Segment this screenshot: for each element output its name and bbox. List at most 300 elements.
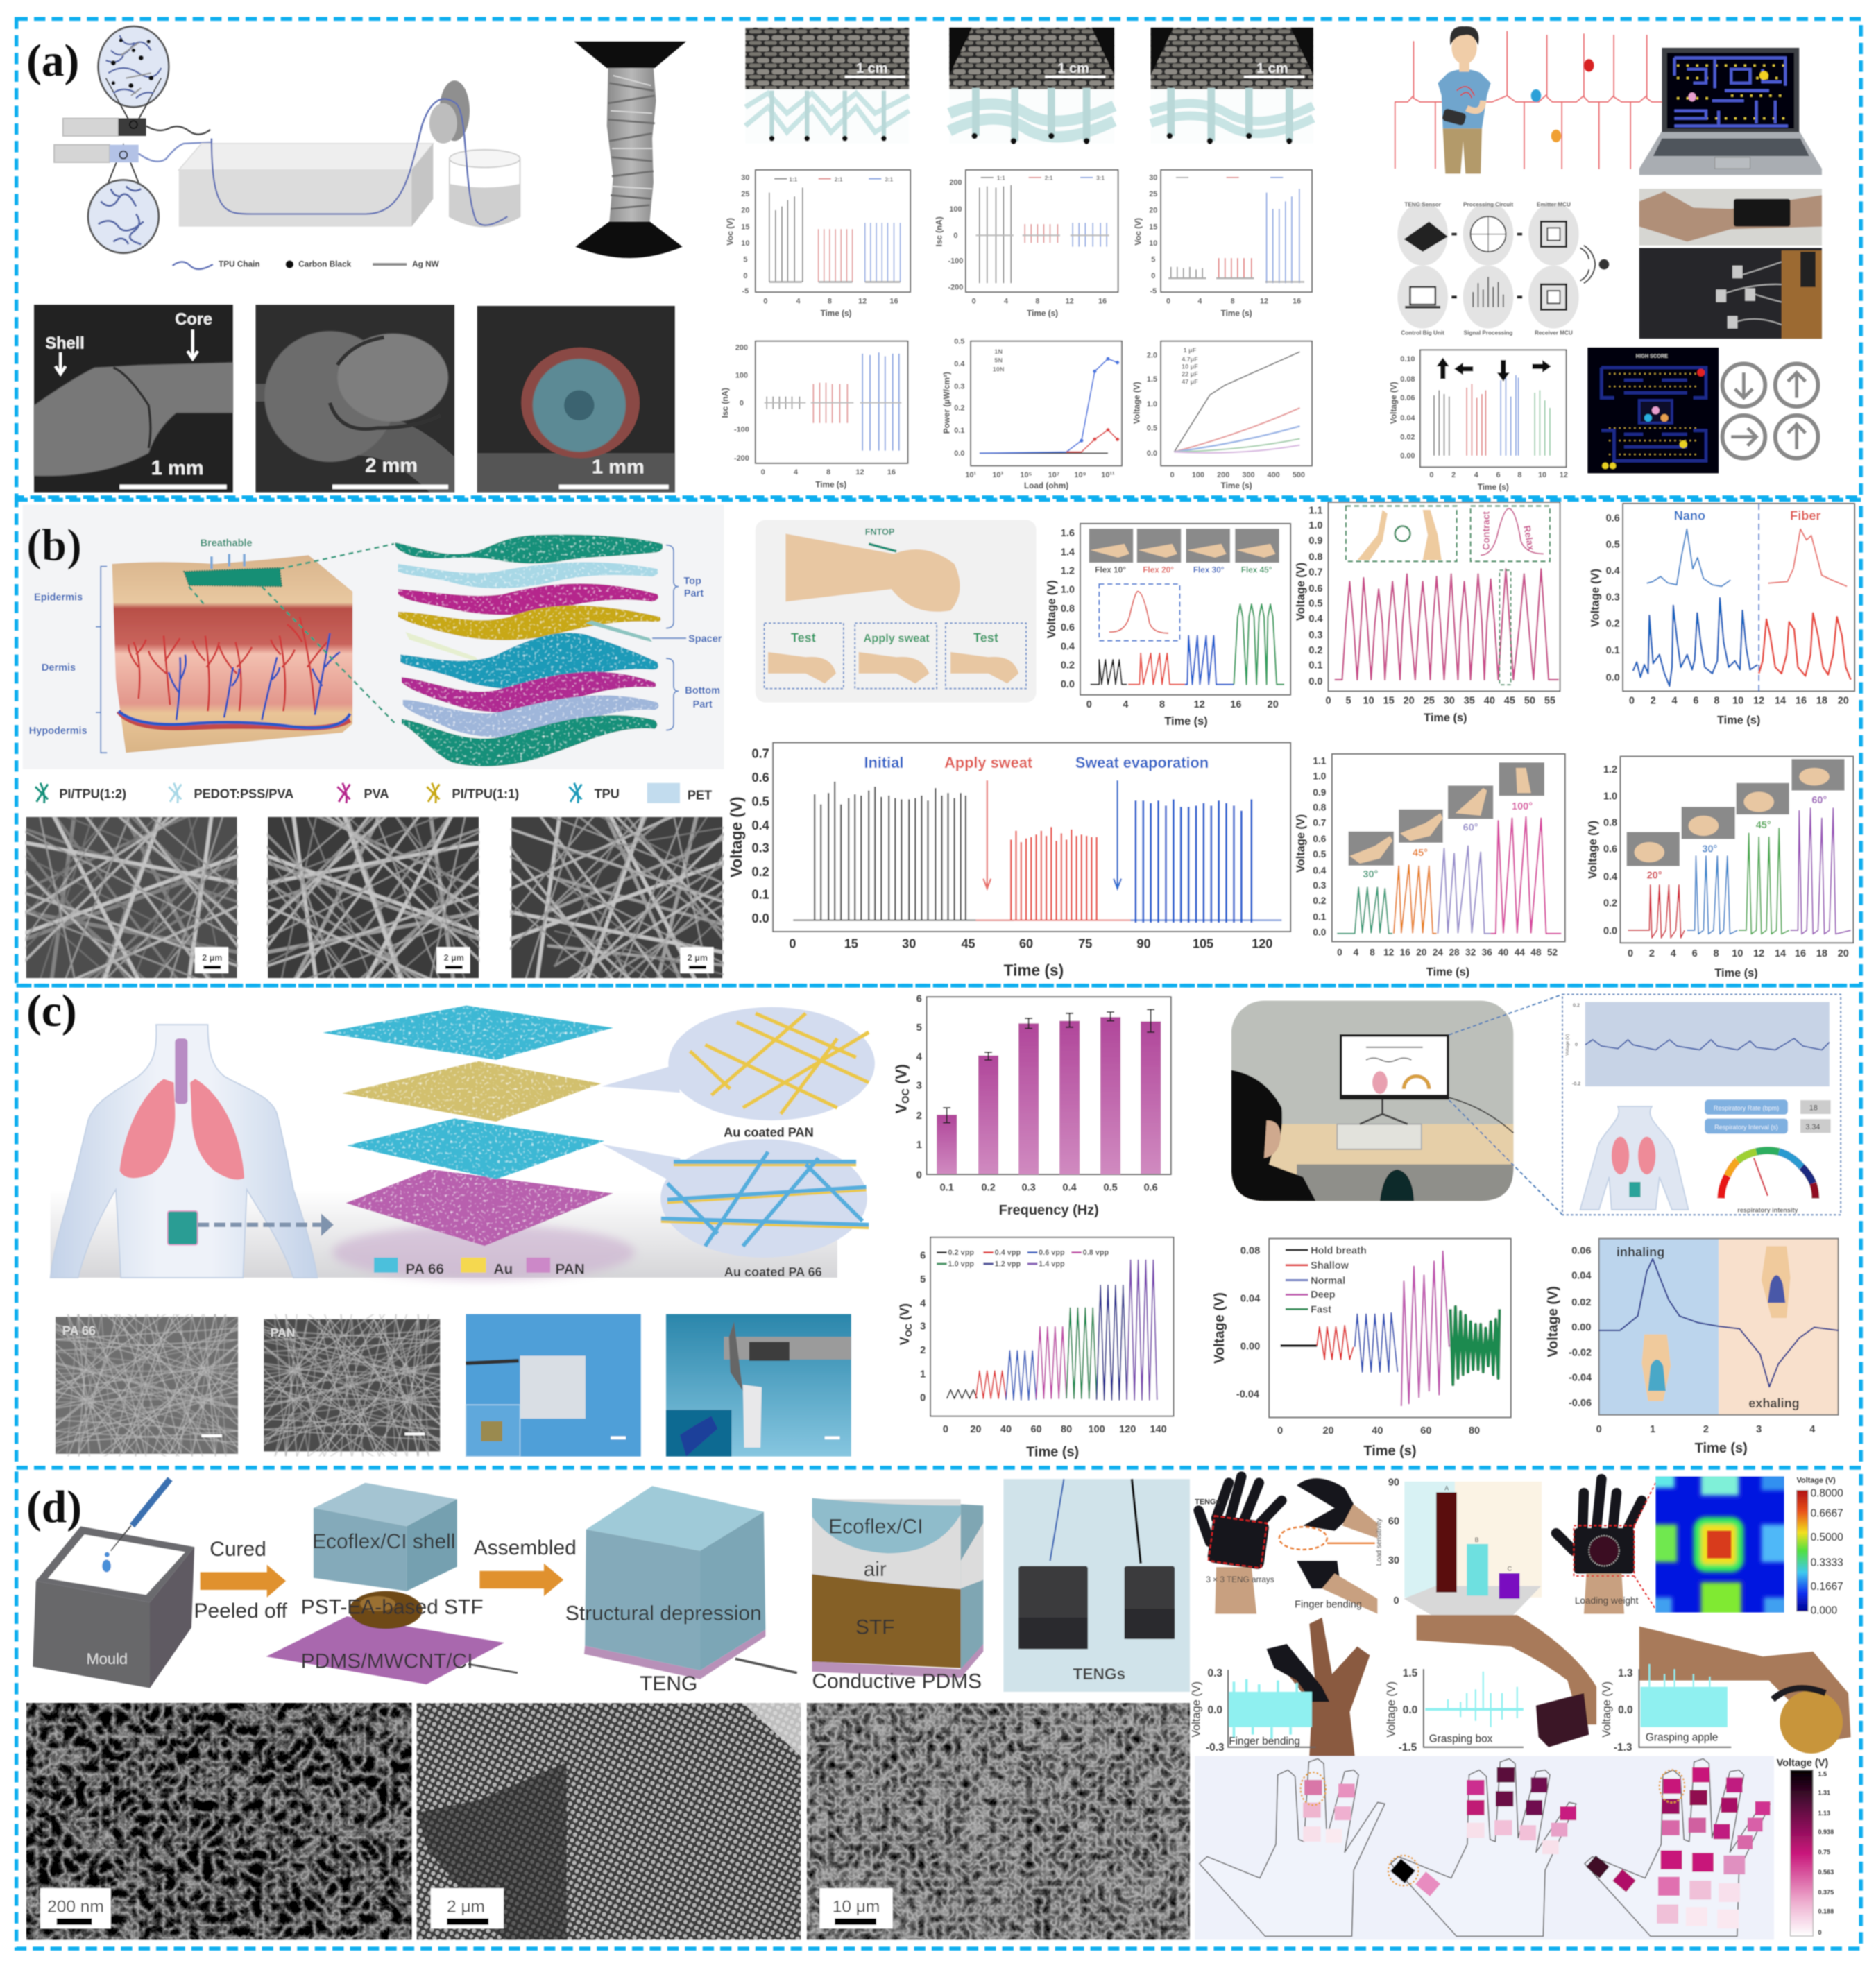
photo: wound fiber spool [574, 42, 686, 258]
signal with hand: grasping box: Voltage (V) [1385, 1681, 1398, 1738]
chart: Voc vs amplitude: 0.6 vpp [1039, 1249, 1065, 1257]
sweat test illustration [756, 520, 1037, 703]
chart: Voc vs frequency bars: 0.3 [1022, 1183, 1036, 1194]
chart: elbow contract and relax: 5 [1346, 695, 1351, 706]
arrow: cured and peeled off: Cured [210, 1538, 266, 1561]
SEM: 200 nm network: 200 nm [47, 1898, 104, 1917]
chart: Voc vs frequency bars: 0 [916, 1170, 922, 1181]
chart: bending angle, arm: 28 [1449, 947, 1460, 957]
exploded sensor layers [395, 535, 663, 766]
chart: bending angle, arm: 0.8 [1313, 803, 1327, 813]
chart: flex angle voltage: 8 [1159, 699, 1165, 710]
legend: PA 66, Au, PAN: PA 66 [405, 1261, 444, 1277]
sweat test illustration: Test [791, 631, 816, 644]
legend: PA 66, Au, PAN: Au [493, 1261, 513, 1277]
layer group labels: Top [683, 576, 701, 587]
SEM micrographs: nanofibers: 2 μm [688, 953, 708, 963]
chart: power versus load: Load (ohm) [1024, 481, 1068, 490]
chart: elbow contract and relax: Voltage (V) [1295, 563, 1307, 621]
chart: bending angle, arm: 0 [1337, 947, 1342, 957]
legend: materials: PI/TPU(1:2) [59, 787, 126, 801]
chart: sweat resistance time series: 120 [1252, 936, 1272, 950]
chart: bending angle, finger: 60° [1811, 795, 1827, 806]
chart: Voc vs frequency bars [893, 993, 1171, 1218]
dashed frame: panel b [17, 499, 1861, 986]
chart: Voc ratio: Voc (V) [726, 218, 735, 246]
chart: power versus load: 10¹¹ [1101, 471, 1115, 479]
signal with hand: grasping apple: 0.0 [1618, 1704, 1633, 1716]
magnified view: Au coated PAN: Au coated PAN [724, 1126, 814, 1140]
panel label (d): (d) [26, 1482, 82, 1532]
SEM: 2 um colloidal crystal: 2 μm [447, 1898, 485, 1917]
chart: capacitor charging: 300 [1242, 471, 1255, 479]
inset: monitoring software interface: respiratory intensity [1737, 1207, 1798, 1214]
chart: Voc vs amplitude: 80 [1061, 1424, 1072, 1435]
chart: Voc vs frequency bars: OC [901, 1088, 912, 1104]
photo: glove with TENG arrays: Finger bending [1295, 1599, 1362, 1610]
wireless sensing flow diagram: Receiver MCU [1535, 330, 1573, 336]
wireless sensing flow diagram: Emitter MCU [1537, 202, 1571, 208]
SEM: shell and core: 1 mm [151, 457, 204, 479]
chart: Voc size: 0 [1166, 297, 1170, 305]
chart: elbow contract and relax: Time (s) [1424, 712, 1467, 724]
chart: bending angle, arm: 20 [1416, 947, 1427, 957]
signal with hand: finger bending: 0.0 [1208, 1704, 1222, 1716]
chart: Voc vs amplitude: (V) [898, 1303, 912, 1324]
chart: Voc vs frequency bars: 6 [916, 993, 922, 1004]
skin layer labels: Hypodermis [29, 726, 87, 737]
chart: power versus load: 10⁷ [1048, 471, 1060, 479]
legend: PA 66, Au, PAN [374, 1258, 585, 1277]
chart: nano vs fiber: 16 [1796, 695, 1807, 706]
chart: nano vs fiber: Voltage (V) [1589, 569, 1602, 627]
sweat test illustration: Apply sweat [863, 632, 930, 644]
chart: bending angle, finger: 20° [1647, 871, 1662, 882]
backdrop gradient [51, 1190, 837, 1278]
SEM: 10 um particles: 10 μm [833, 1898, 880, 1917]
chart: Voc vs amplitude: 0 [920, 1393, 926, 1404]
sweat test illustration: FNTOP [865, 527, 895, 537]
chart: Voc ratio: 5 [743, 255, 747, 264]
chart: nano vs fiber: 14 [1775, 695, 1786, 706]
assembled TENG cube: TENG [640, 1672, 697, 1695]
illustration: laptop running game [1639, 48, 1822, 175]
chart: Voc ratio: 0 [763, 297, 767, 305]
chart: Voc ratio: 20 [741, 207, 749, 215]
chart: 3D bar chart: A [1444, 1485, 1449, 1492]
chart: 3D bar chart: 60 [1388, 1516, 1399, 1527]
chart: nano vs fiber: 10 [1732, 695, 1743, 706]
chart: bending angle, arm: 0.9 [1313, 787, 1327, 798]
SEM: shell and core [34, 305, 233, 492]
chart: bending angle, finger: 0.2 [1603, 898, 1617, 909]
chart: Isc size: -200 [734, 454, 749, 463]
chart: four-direction voltage: 2 [1451, 471, 1456, 479]
skin layer labels [29, 567, 107, 753]
chart: sweat resistance time series: 0 [789, 936, 796, 950]
chart: elbow contract and relax: 10 [1363, 695, 1374, 706]
signal with hand: grasping box: 1.5 [1403, 1668, 1418, 1679]
SEM: PA 66 nanofibers: PA 66 [62, 1324, 96, 1338]
chart: bending angle, arm: 0.2 [1313, 896, 1327, 906]
chart: Voc size [1134, 170, 1312, 318]
chart: inhaling and exhaling: 3 [1756, 1424, 1762, 1435]
chart: bending angle, arm: 0.0 [1313, 927, 1327, 937]
chart: flex angle voltage: 0 [1086, 699, 1092, 710]
skin layer labels: Epidermis [34, 592, 83, 603]
chart: flex angle voltage: 12 [1194, 699, 1205, 710]
chart: bending angle, finger: 8 [1713, 948, 1719, 959]
chart: flex angle voltage: 0.8 [1061, 603, 1075, 615]
fabric photos and renderings: 1 cm [1256, 61, 1288, 76]
wireless sensing flow diagram: TENG Sensor [1404, 202, 1442, 208]
chart: elbow contract and relax: 0.2 [1308, 645, 1322, 656]
panel label (c): (c) [26, 986, 77, 1036]
chart: 3D bar chart: 30 [1388, 1555, 1399, 1566]
colorbar: hand voltage map: 0.375 [1818, 1889, 1834, 1896]
game screen: Pac-Man: HIGH SCORE [1636, 352, 1668, 359]
chart: Isc ratio: 2:1 [1045, 175, 1053, 182]
chart: inhaling and exhaling: -0.02 [1569, 1347, 1592, 1358]
TENG cross-section [812, 1498, 983, 1693]
chart: bending angle, arm: 0.7 [1313, 817, 1326, 828]
background: hand voltage maps [1195, 1756, 1774, 1939]
chart: bending angle, finger: 20 [1838, 948, 1849, 959]
chart: bending angle, arm: 0.5 [1313, 849, 1327, 859]
dashed frame: panel c [17, 986, 1861, 1468]
chart: Voc vs frequency bars: V [893, 1104, 910, 1113]
photo: sensor on arm [1639, 189, 1822, 246]
chart: elbow contract and relax: Relax [1521, 524, 1536, 551]
chart: Isc ratio: -100 [948, 257, 963, 265]
chart: bending angle, finger: 14 [1775, 948, 1786, 959]
SEM micrographs: nanofibers: 2 μm [444, 953, 464, 963]
colorbar: hand voltage map: 1.31 [1818, 1790, 1830, 1797]
chart: elbow contract and relax: 0.4 [1308, 613, 1322, 624]
chart: sweat resistance time series: 75 [1078, 936, 1092, 950]
signal with hand: grasping apple: -1.3 [1614, 1742, 1632, 1754]
chart: Voc ratio: 2:1 [835, 176, 843, 182]
chart: 3D bar chart: Load sensitivity [1376, 1518, 1383, 1566]
chart: Isc size: 4 [794, 468, 798, 477]
wireless sensing flow diagram: Control Big Unit [1401, 330, 1444, 336]
chart: bending angle, arm: 0.4 [1313, 865, 1327, 875]
chart: Isc size: -100 [734, 425, 749, 434]
colorbar: heatmap scale: 0.1667 [1811, 1581, 1843, 1593]
chart: Voc ratio: 25 [741, 190, 749, 198]
chart: flex angle voltage: Flex 10° [1095, 566, 1126, 575]
chart: Isc ratio: 12 [1066, 297, 1074, 305]
chart: nano vs fiber: 6 [1693, 695, 1698, 706]
legend: materials [35, 783, 712, 803]
chart: power versus load: 10¹ [965, 471, 976, 479]
colorbar: hand voltage map: 0 [1818, 1929, 1822, 1936]
panel label (b): (b) [26, 521, 82, 571]
chart: bending angle, finger: 6 [1692, 948, 1698, 959]
chart: flex angle voltage: 1.0 [1061, 585, 1075, 596]
chart: power versus load: 10⁵ [1020, 471, 1032, 479]
chart: Voc vs amplitude: 2 [920, 1345, 926, 1356]
chart: Isc size: Isc (nA) [721, 388, 730, 418]
chart: bending angle, arm: 1.0 [1313, 771, 1327, 781]
dashed callout lines [1449, 995, 1562, 1215]
chart: Voc size: 16 [1293, 297, 1301, 305]
chart: Voc size: Time (s) [1221, 309, 1252, 318]
chart: elbow contract and relax: 45 [1504, 695, 1515, 706]
exploded nanofiber layers [323, 1006, 613, 1246]
chart: Isc ratio [935, 170, 1118, 318]
breathable sensor patch [184, 538, 397, 725]
chart: capacitor charging: 1 μF [1184, 347, 1197, 354]
photo: glove with TENG arrays: TENGs [1195, 1498, 1220, 1507]
colorbar: hand voltage map [1777, 1758, 1834, 1936]
chart: breathing modes: Normal [1311, 1276, 1345, 1287]
chart: Voc vs frequency bars: 2 [916, 1111, 922, 1122]
magnified view: Au coated PAN [602, 1007, 875, 1140]
illustration: torso with lungs [51, 1025, 334, 1278]
chart: power versus load: 0.1 [954, 427, 964, 435]
chart: nano vs fiber: 8 [1714, 695, 1719, 706]
signal with hand: grasping box: Grasping box [1429, 1733, 1493, 1745]
chart: Voc ratio: 10 [741, 239, 749, 248]
assembled TENG cube: Structural depression [565, 1602, 762, 1625]
chart: inhaling and exhaling: -0.04 [1569, 1373, 1592, 1384]
legend: PA 66, Au, PAN: PAN [555, 1261, 585, 1277]
chart: Voc ratio: 4 [796, 297, 801, 305]
chart: elbow contract and relax: 30 [1444, 695, 1455, 706]
chart: nano vs fiber: 0.0 [1606, 673, 1620, 684]
panel (b): sweat-resistant skin sensor [14, 499, 1861, 995]
chart: elbow contract and relax: 0.9 [1308, 536, 1322, 547]
chart: Voc ratio: 0 [743, 272, 747, 280]
illustration: skin cross-section [112, 555, 352, 753]
signal with hand: finger bending: 0.3 [1208, 1668, 1222, 1679]
schematic background [23, 505, 724, 769]
chart: 3D bar chart [1376, 1477, 1542, 1618]
legend: materials: PI/TPU(1:1) [452, 787, 519, 801]
chart: power versus load: 0.3 [954, 383, 964, 391]
chart: 3D bar chart: 0 [1394, 1595, 1399, 1607]
ECG signal trace [1395, 31, 1662, 169]
chart: Isc size [721, 341, 907, 489]
inset: monitoring software interface: 0 [1575, 1041, 1578, 1047]
chart: Isc ratio: 0 [953, 232, 957, 240]
chart: bending angle, arm: 36 [1482, 947, 1492, 957]
chart: Voc vs amplitude: 60 [1030, 1424, 1042, 1435]
chart: sweat resistance time series: 0.1 [752, 888, 769, 902]
chart: bending angle, arm: 32 [1465, 947, 1476, 957]
chart: inhaling and exhaling: 2 [1703, 1424, 1709, 1435]
schematic: coaxial wet spinning [54, 26, 520, 253]
chart: Voc vs amplitude: 120 [1119, 1424, 1136, 1435]
SEM: fiber cross-section [477, 306, 675, 492]
SEM: knot: 2 mm [365, 455, 418, 477]
chart: Voc ratio: 8 [828, 297, 832, 305]
chart: four-direction voltage: 6 [1496, 471, 1501, 479]
colorbar: heatmap scale: 0.8000 [1811, 1488, 1843, 1500]
chart: four-direction voltage: 12 [1560, 471, 1568, 479]
colorbar: hand voltage map: 1.5 [1818, 1771, 1827, 1778]
arrow: cured and peeled off [194, 1538, 287, 1622]
photo: TENG samples: TENGs [1073, 1665, 1125, 1683]
chart: capacitor charging: Voltage (V) [1132, 382, 1141, 424]
chart: Voc size: 30 [1149, 174, 1157, 182]
chart: four-direction voltage: 4 [1474, 471, 1478, 479]
signal with hand: finger bending: Voltage (V) [1190, 1681, 1202, 1738]
chart: Isc ratio: 4 [1004, 297, 1008, 305]
chart: capacitor charging: 0.5 [1147, 425, 1157, 433]
chart: Voc size: 12 [1260, 297, 1268, 305]
chart: flex angle voltage: 20 [1268, 699, 1279, 710]
chart: nano vs fiber: 4 [1672, 695, 1678, 706]
chart: elbow contract and relax: 40 [1484, 695, 1495, 706]
chart: bending angle, finger: 2 [1649, 948, 1655, 959]
exploded TENG components: Ecoflex/CI shell [312, 1530, 455, 1553]
signal with hand: grasping apple [1601, 1627, 1851, 1754]
chart: four-direction voltage [1390, 350, 1568, 492]
chart: Voc vs frequency bars: 0.2 [982, 1183, 996, 1194]
chart: Voc vs amplitude: 5 [920, 1274, 926, 1285]
legend: materials: TPU [595, 787, 620, 801]
arrow: assembled: Assembled [474, 1536, 577, 1559]
chart: Voc ratio: 30 [741, 174, 749, 182]
chart: power versus load: 0.0 [954, 449, 964, 458]
chart: Voc size: -5 [1150, 287, 1157, 296]
chart: nano vs fiber: 0.3 [1606, 592, 1620, 603]
signal with hand: grasping box: 0.0 [1403, 1704, 1417, 1716]
chart: elbow contract and relax: 0.5 [1308, 599, 1322, 610]
legend: materials: PEDOT:PSS/PVA [194, 787, 293, 801]
chart: inhaling and exhaling: 0.02 [1571, 1297, 1591, 1308]
chart: bending angle, finger: 45° [1756, 820, 1771, 831]
colorbar: hand voltage map: 0.75 [1818, 1849, 1830, 1856]
chart: breathing modes: Time (s) [1363, 1444, 1417, 1459]
chart: Voc size: 15 [1149, 223, 1157, 231]
chart: nano vs fiber: Fiber [1790, 508, 1820, 522]
chart: sweat resistance time series: 0.5 [752, 794, 769, 808]
chart: Voc size: 5 [1151, 255, 1155, 264]
layer group labels [652, 545, 722, 730]
chart: capacitor charging: 47 μF [1182, 378, 1198, 385]
chart: 3D bar chart: 90 [1388, 1477, 1399, 1488]
chart: bending angle, arm: 0.6 [1313, 834, 1327, 844]
chart: capacitor charging: 2.0 [1147, 351, 1157, 359]
inset: monitoring software interface: 18 [1809, 1104, 1818, 1113]
chart: Voc vs amplitude: 4 [920, 1299, 926, 1310]
chart: elbow contract and relax: 55 [1544, 695, 1555, 706]
chart: Voc size: 4 [1197, 297, 1202, 305]
chart: inhaling and exhaling: exhaling [1748, 1396, 1800, 1410]
mould illustration: Mould [87, 1650, 128, 1668]
chart: bending angle, arm: 44 [1515, 947, 1525, 957]
chart: power versus load: 10N [993, 366, 1004, 372]
illustration: man wearing sensor [1438, 26, 1594, 173]
chart: flex angle voltage: 1.2 [1061, 566, 1075, 577]
panel (d): shear thickening TENG glove [17, 1468, 1861, 1948]
colorbar: heatmap scale [1797, 1477, 1843, 1616]
chart: bending angle, finger: 1.2 [1603, 764, 1617, 776]
TENG cross-section: air [864, 1558, 887, 1581]
chart: nano vs fiber: Time (s) [1717, 714, 1760, 726]
chart: elbow contract and relax: 0.0 [1308, 676, 1322, 687]
chart: flex angle voltage [1046, 524, 1290, 728]
chart: Voc vs frequency bars: 0.6 [1144, 1183, 1158, 1194]
chart: flex angle voltage: 1.4 [1061, 547, 1075, 558]
chart: bending angle, arm: 45° [1413, 848, 1428, 859]
chart: flex angle voltage: 0.4 [1061, 641, 1075, 652]
chart: bending angle, arm: Time (s) [1426, 966, 1469, 978]
chart: elbow contract and relax: 50 [1524, 695, 1535, 706]
chart: Voc ratio: Time (s) [821, 309, 852, 318]
chart: flex angle voltage: Flex 45° [1241, 566, 1272, 575]
chart: Voc vs amplitude: 100 [1089, 1424, 1105, 1435]
chart: inhaling and exhaling: -0.06 [1569, 1398, 1592, 1409]
chart: inhaling and exhaling: 0.00 [1571, 1322, 1591, 1333]
chart: elbow contract and relax: 0.7 [1308, 567, 1322, 578]
chart: elbow contract and relax: 0.1 [1308, 660, 1322, 671]
chart: flex angle voltage: Time (s) [1164, 715, 1208, 728]
wireless sensing flow diagram: Signal Processing [1464, 330, 1512, 336]
chart: power versus load: 10³ [992, 471, 1003, 479]
chart: bending angle, arm: 12 [1383, 947, 1395, 957]
chart: Isc size: 0 [761, 468, 765, 477]
chart: nano vs fiber: 0.4 [1606, 566, 1620, 577]
chart: Isc ratio: Isc (nA) [935, 216, 944, 247]
chart: nano vs fiber: Nano [1674, 508, 1705, 522]
panel label (a): (a) [26, 36, 79, 86]
skin layer labels: Dermis [42, 662, 76, 674]
chart: four-direction voltage: 0 [1429, 471, 1433, 479]
chart: bending angle, finger: 4 [1671, 948, 1676, 959]
chart: nano vs fiber: 0 [1629, 695, 1635, 706]
chart: breathing modes: Hold breath [1311, 1245, 1367, 1256]
exploded TENG components: PST-EA-based STF [301, 1595, 484, 1618]
chart: breathing modes: Voltage (V) [1212, 1292, 1227, 1364]
chart: capacitor charging: 4.7μF [1182, 356, 1198, 363]
chart: elbow contract and relax: 1.1 [1308, 505, 1322, 516]
chart: nano vs fiber: 0.5 [1606, 539, 1620, 550]
chart: Isc size: 200 [735, 343, 748, 352]
inset: monitoring software interface: 3.34 [1805, 1123, 1820, 1131]
chart: nano vs fiber [1589, 504, 1854, 726]
chart: capacitor charging [1132, 341, 1312, 490]
chart: bending angle, arm [1295, 754, 1565, 978]
chart: four-direction voltage: Voltage (V) [1390, 382, 1399, 424]
signal with hand: finger bending: -0.3 [1206, 1742, 1225, 1754]
chart: capacitor charging: 10 μF [1182, 363, 1198, 370]
chart: Voc ratio [726, 170, 910, 318]
exploded TENG components: PDMS/MWCNT/CI [301, 1650, 473, 1672]
chart: four-direction voltage: 0.06 [1400, 394, 1415, 402]
chart: sweat resistance time series: 0.0 [752, 911, 769, 925]
chart: capacitor charging: 100 [1192, 471, 1204, 479]
chart: power versus load: 1N [994, 348, 1003, 355]
chart: Isc ratio: 0 [972, 297, 976, 305]
legend: materials: PET [688, 788, 712, 802]
chart: Isc ratio: 3:1 [1096, 175, 1105, 182]
chart: capacitor charging: 400 [1268, 471, 1280, 479]
chart: bending angle, finger: 18 [1816, 948, 1827, 959]
chart: Isc size: 100 [735, 371, 748, 379]
TENG cross-section: Conductive PDMS [812, 1670, 982, 1693]
signal with hand: finger bending: Finger bending [1229, 1736, 1300, 1747]
photo: circuit board and sensors [1639, 248, 1822, 339]
wireless sensing flow diagram [1397, 202, 1609, 336]
chart: nano vs fiber: 0.2 [1606, 619, 1620, 630]
layer group labels: Bottom [685, 685, 720, 696]
chart: flex angle voltage: 4 [1123, 699, 1128, 710]
chart: bending angle, finger: 1.0 [1603, 791, 1617, 802]
